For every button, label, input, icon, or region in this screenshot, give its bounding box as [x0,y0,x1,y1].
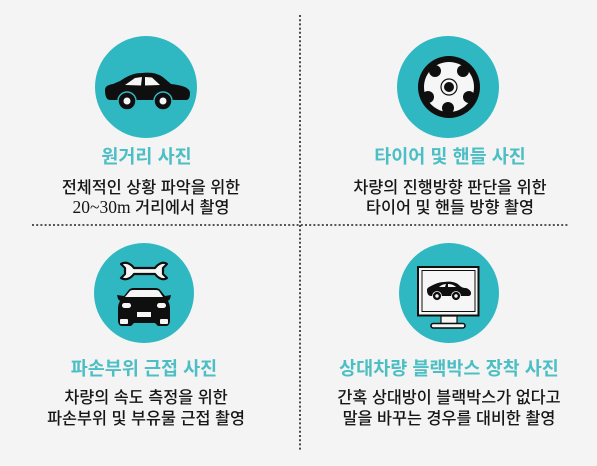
text block: close-up description [47,389,245,428]
heading: tire and steering photo: 타이어 및 핸들 사진 [374,146,526,167]
text block: long-distance description: 20~30m 거리에서 촬영 [72,197,230,217]
text block: close-up description: 파손부위 및 부유물 근접 촬영 [47,410,245,428]
heading: other vehicle dashcam photo: 상대차량 블랙박스 장착 사진 [339,358,559,379]
icon: wrench and car front [94,243,194,343]
text block: dashcam description [337,389,561,428]
text block: tire description: 타이어 및 핸들 방향 촬영 [366,199,534,217]
panel: damaged part close-up photo [47,243,245,428]
panel: tire and steering photo [353,36,547,217]
heading: long-distance photo: 원거리 사진 [101,146,192,167]
text block: dashcam description: 말을 바꾸는 경우를 대비한 촬영 [343,410,555,428]
icon: tire wheel [397,36,499,138]
text block: dashcam description: 간혹 상대방이 블랙박스가 없다고 [337,389,561,407]
text block: tire description [353,179,547,217]
text block: close-up description: 차량의 속도 측정을 위한 [64,389,228,407]
panel: other vehicle dashcam photo [337,243,561,428]
icon: monitor showing car [399,243,499,343]
panel: long-distance photo [62,36,240,217]
text block: long-distance description: 전체적인 상황 파악을 위한 [62,179,240,197]
text block: long-distance description [62,179,240,217]
text block: tire description: 차량의 진행방향 판단을 위한 [353,179,547,197]
icon: side view car [95,36,197,138]
heading: damaged part close-up photo: 파손부위 근접 사진 [71,358,217,379]
